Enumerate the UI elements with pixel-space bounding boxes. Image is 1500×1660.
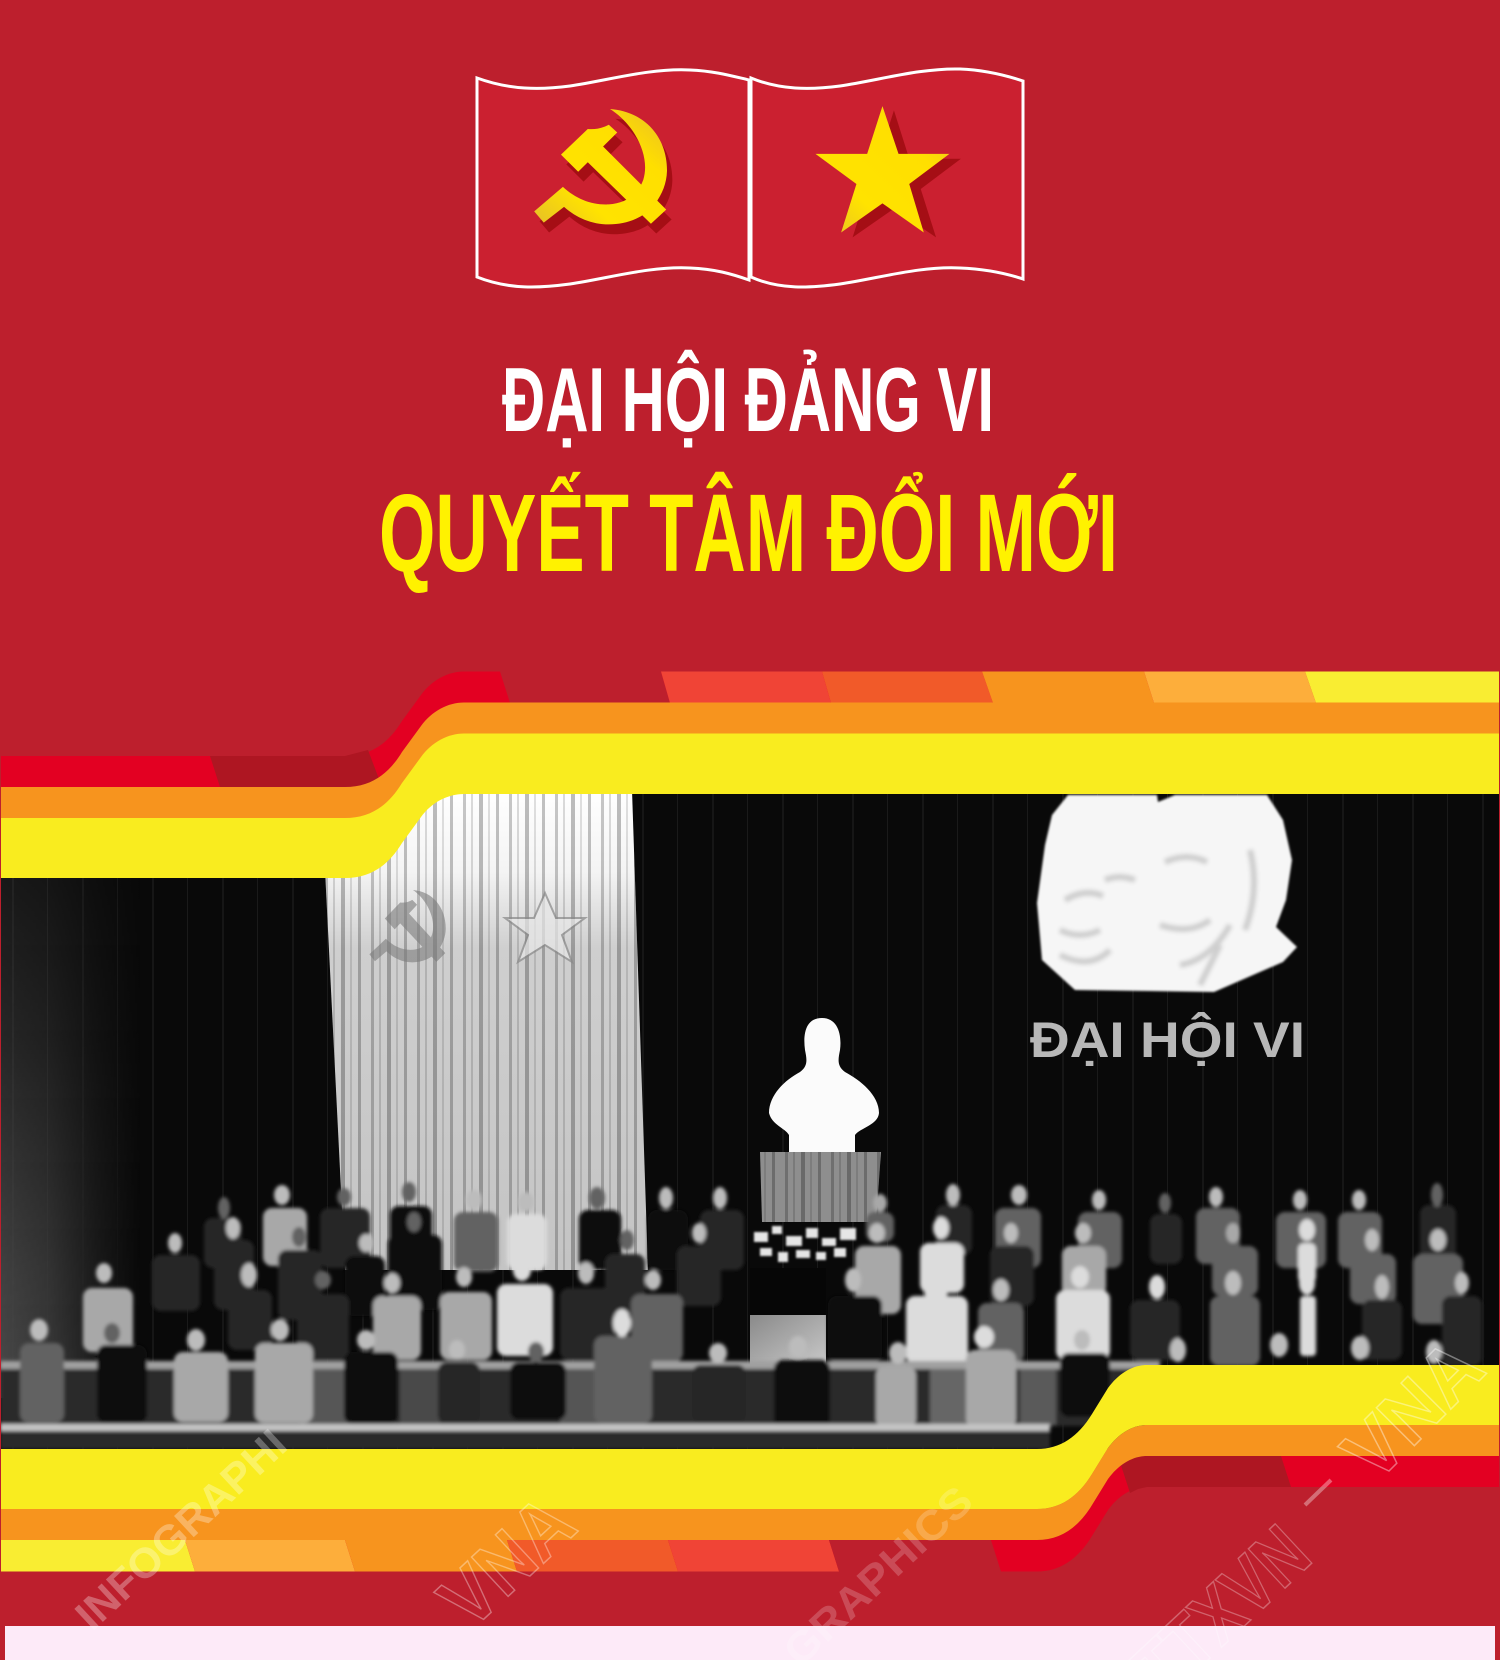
bottom ribbon [0, 1365, 1500, 1572]
pale panel at bottom [5, 1626, 1495, 1660]
photo: party congress stage [0, 790, 1500, 1449]
watermark: VNA right: VNA [1325, 1322, 1500, 1497]
watermark: VNA left: VNA [422, 1478, 591, 1644]
title: line 2: QUYẾT TÂM ĐỔI MỚI [379, 472, 1118, 595]
bottom ribbon yellow band [0, 1365, 1500, 1509]
front row [20, 1343, 64, 1423]
third row [83, 1288, 133, 1352]
icon: hammer and sickle [534, 109, 672, 234]
desk [0, 1361, 1160, 1369]
title: line 1: ĐẠI HỘI ĐẢNG VI [502, 349, 994, 451]
photo sign text: ĐẠI HỘI VI [1030, 1011, 1305, 1068]
party flag [477, 70, 749, 287]
top ribbon yellow band [0, 734, 1500, 878]
delegates [0, 1182, 1482, 1449]
bottom ribbon red band [0, 1456, 1500, 1572]
curtain emblem: star [505, 893, 585, 962]
flags [477, 69, 1023, 287]
icon: star [815, 106, 961, 237]
back row [204, 1218, 242, 1268]
watermarks [66, 1322, 1500, 1660]
bust of Ho Chi Minh [769, 1018, 879, 1155]
pedestal and flowers [750, 1152, 881, 1365]
portrait relief: Marx and Lenin [1037, 795, 1297, 992]
top ribbon red band [0, 672, 1500, 818]
top ribbon orange band [0, 702, 1500, 830]
second row [152, 1255, 200, 1311]
page edge lines [0, 671, 1500, 1626]
watermark: dash [1305, 1480, 1331, 1505]
top ribbon [0, 672, 1500, 878]
curtain emblem: hammer and sickle [369, 890, 446, 962]
stage edge [0, 1424, 1050, 1431]
watermark: infographics left: INFOGRAPHI [66, 1420, 296, 1639]
bottom ribbon orange band [0, 1425, 1500, 1540]
national flag [751, 69, 1023, 287]
curtain [321, 790, 648, 1270]
